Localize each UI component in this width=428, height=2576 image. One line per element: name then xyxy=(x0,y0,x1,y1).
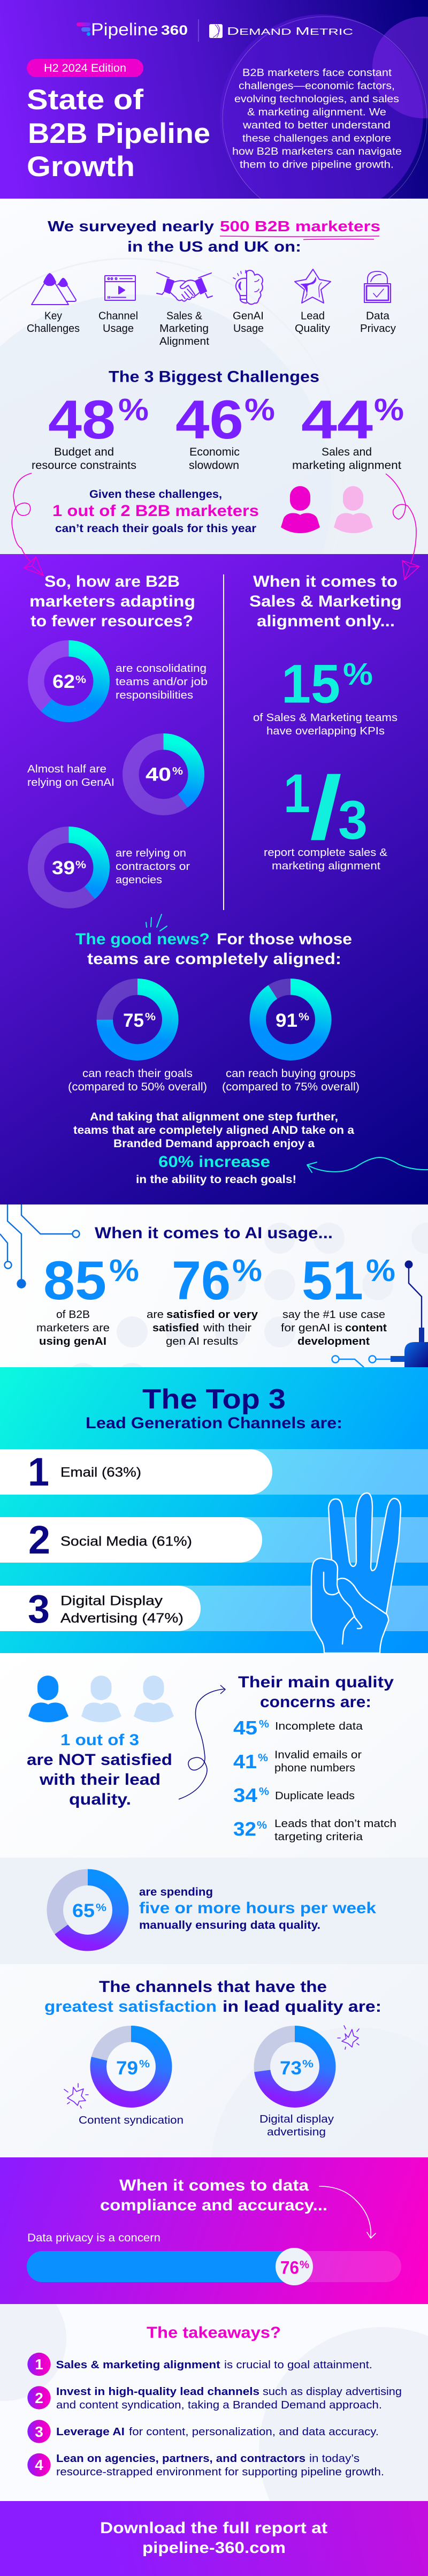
donut: 91 percent: can reach buying groups xyxy=(226,1067,356,1080)
takeaway 1: is crucial to goal attainment. xyxy=(224,2359,372,2371)
donut: 79 percent: Content syndication xyxy=(79,2115,184,2126)
circuit: left xyxy=(0,1204,79,1288)
stat list: concerns: Duplicate leads xyxy=(275,1790,355,1802)
text: five or more hours: manually ensuring data quality. xyxy=(139,1919,320,1931)
bar: email xyxy=(0,1449,272,1495)
topic labels: Privacy xyxy=(360,323,396,335)
stat: 15 percent: 15 xyxy=(281,653,340,714)
text: branded demand: 60% increase xyxy=(158,1153,270,1171)
bar: social media: 2 xyxy=(28,1518,50,1562)
stat: 76 percent xyxy=(147,1250,262,1347)
panel: footer: Download the full report at xyxy=(100,2519,327,2537)
text: branded demand: And taking that alignment one step further, xyxy=(90,1111,338,1123)
text: 1 out of 3: 1 out of 3 xyxy=(60,1731,139,1749)
stat: 44 percent: 44 xyxy=(301,389,373,450)
donut: 91 percent: 91 xyxy=(276,1010,297,1031)
logo: Pipeline360 xyxy=(77,20,188,39)
takeaway 3 xyxy=(27,2420,379,2443)
topic labels: Channel xyxy=(98,310,138,322)
donut: 62 percent xyxy=(36,648,102,714)
survey heading xyxy=(48,218,380,255)
text: 1 out of 3 xyxy=(27,1731,172,1808)
survey heading: 500 B2B marketers xyxy=(220,218,380,234)
topic labels: Data xyxy=(366,310,390,322)
heading: alignment: When it comes to xyxy=(253,573,398,590)
takeaway 1: Sales & marketing alignment xyxy=(56,2359,220,2371)
text: 1 out of 3: quality. xyxy=(69,1791,131,1808)
bar: email: Email (63%) xyxy=(60,1465,141,1480)
arrow: cyan wave xyxy=(307,1157,428,1172)
topic labels: Alignment xyxy=(159,336,209,347)
bar: email: 1 xyxy=(28,1450,49,1494)
icon: mountains xyxy=(32,274,76,305)
arrow: left swirl with paper plane xyxy=(12,473,43,575)
stat: one third: marketing alignment xyxy=(272,860,380,872)
progress bar: 76 percent xyxy=(27,2248,401,2285)
stat: 85 percent: marketers are xyxy=(36,1322,110,1334)
arrow: navy loop xyxy=(179,1685,225,1799)
text: consolidating: responsibilities xyxy=(116,690,193,701)
heading: top 3 xyxy=(86,1384,342,1432)
intro paragraph: them to drive pipeline growth. xyxy=(240,158,394,170)
intro paragraph: challenges—economic factors, xyxy=(239,80,395,92)
heading: top 3: The Top 3 xyxy=(142,1384,286,1415)
survey heading: in the US and UK on: xyxy=(127,238,301,255)
stat: 76 percent: satisfied or very xyxy=(166,1309,258,1321)
takeaway 3: 3 xyxy=(35,2423,43,2440)
takeaway 4: resource-strapped environment for supporting pipeline growth. xyxy=(56,2466,384,2478)
donut: 79 percent: 79 xyxy=(116,2058,138,2079)
stat list: concerns: 34 xyxy=(233,1784,257,1806)
topic labels xyxy=(27,310,396,347)
donut: 40 percent: % xyxy=(172,766,183,777)
topic labels: Marketing xyxy=(159,323,209,335)
text: five or more hours xyxy=(139,1886,376,1931)
stat: 51 percent: content xyxy=(345,1322,387,1334)
stat: 15 percent: have overlapping KPIs xyxy=(266,725,385,737)
donut: 79 percent: % xyxy=(139,2058,150,2070)
stat: 85 percent: using genAI xyxy=(39,1336,106,1347)
heading: main concerns: Their main quality xyxy=(238,1673,394,1691)
stat: 85 percent xyxy=(36,1250,139,1347)
topic labels: Quality xyxy=(295,323,330,335)
text: contractors xyxy=(116,847,190,886)
panel: data compliance xyxy=(0,2157,428,2304)
donut: 65 percent xyxy=(55,1877,120,1943)
text: five or more hours: are spending xyxy=(139,1886,213,1898)
stat: 46 percent: slowdown xyxy=(189,459,239,472)
icon: star xyxy=(295,269,331,303)
callout: 1 out of 2: 1 out of 2 B2B marketers xyxy=(52,502,259,520)
stat: 51 percent: % xyxy=(366,1253,395,1288)
stat: 76 percent: with their xyxy=(203,1322,251,1334)
intro paragraph: & marketing alignment. We xyxy=(247,106,386,118)
bar: digital display xyxy=(0,1586,201,1631)
panel: footer: pipeline-360.com xyxy=(142,2539,286,2557)
panel: top 3 lead generation channels xyxy=(0,1367,428,1653)
donut: 65 percent: 65 xyxy=(72,1900,95,1921)
bar: social media: Social Media (61%) xyxy=(60,1534,192,1549)
donut: 75 percent: 75 xyxy=(123,1010,144,1031)
stat: 15 percent: of Sales & Marketing teams xyxy=(253,712,398,724)
panel: lead quality xyxy=(0,1676,428,2157)
stat: 46 percent: % xyxy=(244,392,275,427)
intro paragraph xyxy=(232,67,402,170)
heading: adapting xyxy=(29,573,195,630)
stat: one third: / xyxy=(310,759,342,858)
heading: compliance: When it comes to data xyxy=(119,2177,309,2194)
callout: 1 out of 2: can’t reach their goals for this year xyxy=(55,522,256,535)
stat: 48 percent: % xyxy=(118,392,149,427)
panel: takeaways xyxy=(0,2304,428,2501)
heading: adapting: to fewer resources? xyxy=(30,612,193,630)
topic labels: Usage xyxy=(233,323,264,335)
text: branded demand: in the ability to reach goals! xyxy=(136,1173,296,1186)
text: genAI reliance xyxy=(27,763,114,789)
stat list: concerns: % xyxy=(257,1820,267,1831)
panel: header xyxy=(0,0,428,199)
intro paragraph: these challenges and explore xyxy=(242,133,391,145)
stat: 46 percent xyxy=(175,389,275,472)
stat: 76 percent: satisfied xyxy=(152,1322,199,1334)
stat list: concerns: phone numbers xyxy=(274,1762,355,1774)
heading: top 3: Lead Generation Channels are: xyxy=(86,1414,342,1432)
topic labels: Sales & xyxy=(166,310,203,322)
stat: 51 percent: development xyxy=(297,1336,370,1347)
donut: 75 percent: % xyxy=(145,1011,156,1023)
takeaway 3: for content, personalization, and data accuracy. xyxy=(129,2426,379,2438)
intro paragraph: wanted to better understand xyxy=(242,119,391,131)
heading: good news: teams are completely aligned: xyxy=(87,950,341,968)
stat list: concerns: Invalid emails or xyxy=(274,1749,362,1761)
heading: good news: The good news? xyxy=(75,930,210,948)
heading: alignment: Sales & Marketing xyxy=(249,593,402,610)
donut: 62 percent: % xyxy=(75,674,86,686)
takeaway 1: 1 xyxy=(35,2356,43,2373)
heading: alignment xyxy=(249,573,402,630)
panel: AI usage xyxy=(0,1204,428,1367)
donut: 75 percent: (compared to 50% overall) xyxy=(68,1081,207,1093)
progress bar: 76 percent: % xyxy=(300,2259,309,2271)
heading: alignment: alignment only... xyxy=(257,612,395,630)
donut: 73 percent: advertising xyxy=(267,2126,326,2138)
icon: genAI brain xyxy=(233,270,263,304)
heading: greatest satisfaction xyxy=(44,1978,381,2016)
takeaway 4: 4 xyxy=(35,2457,43,2473)
icon: lock xyxy=(364,271,391,302)
stat: one third: 3 xyxy=(338,790,368,851)
stat: one third xyxy=(264,759,388,872)
donut: 62 percent: 62 xyxy=(52,671,75,692)
title: B2B Pipeline xyxy=(28,118,210,149)
stat: 85 percent: % xyxy=(109,1253,139,1288)
heading: adapting: marketers adapting xyxy=(29,593,195,610)
donut: 73 percent xyxy=(259,2034,334,2138)
donut: 73 percent: 73 xyxy=(280,2058,302,2079)
stat: 44 percent xyxy=(292,389,404,472)
heading: good news xyxy=(75,930,352,968)
donut: 40 percent xyxy=(131,741,196,807)
donut: 39 percent xyxy=(36,835,102,900)
takeaway 2 xyxy=(27,2386,402,2411)
heading: greatest satisfaction: greatest satisfaction xyxy=(44,1998,217,2016)
text: 1 out of 3: are NOT satisfied xyxy=(27,1751,172,1769)
stat: 51 percent xyxy=(281,1250,395,1347)
title: Growth xyxy=(27,151,135,183)
donut: 91 percent: % xyxy=(299,1011,309,1023)
heading: good news: For those whose xyxy=(217,930,352,948)
text: consolidating xyxy=(116,663,208,701)
icon: handshake xyxy=(157,272,212,301)
heading: adapting: So, how are B2B xyxy=(44,573,180,590)
arrow: white curve xyxy=(319,2186,376,2238)
heading: compliance xyxy=(100,2177,327,2214)
title xyxy=(27,84,210,183)
intro paragraph: evolving technologies, and sales xyxy=(234,93,399,105)
bar: digital display: Digital Display xyxy=(60,1594,163,1609)
icon: star right xyxy=(338,2026,359,2049)
takeaway 3: Leverage AI xyxy=(56,2426,125,2438)
stat: 51 percent: 51 xyxy=(302,1250,363,1311)
panel: purple section xyxy=(0,554,428,1204)
stat: 51 percent: for genAI is xyxy=(281,1322,342,1334)
stat: 44 percent: % xyxy=(374,392,404,427)
stat list: concerns: % xyxy=(258,1752,268,1764)
callout: 1 out of 2: Given these challenges, xyxy=(89,488,222,501)
stat: 48 percent: resource constraints xyxy=(32,459,136,472)
logo: Pipeline360: Pipeline xyxy=(91,20,158,39)
stat: 76 percent: % xyxy=(232,1253,262,1288)
icon: people blue xyxy=(28,1676,174,1722)
text: genAI reliance: Almost half are xyxy=(27,763,106,775)
progress bar: 76 percent: 76 xyxy=(280,2258,299,2278)
heading: takeaways: The takeaways? xyxy=(147,2324,281,2342)
donut: 73 percent: Digital display xyxy=(259,2113,334,2125)
donut: 73 percent: % xyxy=(302,2058,314,2070)
icon: cyan sparks xyxy=(146,914,167,931)
bar label: Data privacy is a concern xyxy=(27,2232,160,2244)
donut: 39 percent: % xyxy=(75,859,86,871)
donut: 75 percent: can reach their goals xyxy=(82,1067,193,1080)
takeaway 1 xyxy=(27,2353,372,2376)
topic labels: Lead xyxy=(301,310,325,322)
title: State of xyxy=(27,84,143,116)
heading: greatest satisfaction: The channels that have the xyxy=(99,1978,327,1996)
donut: 65 percent: % xyxy=(96,1902,106,1914)
stat: 46 percent: Economic xyxy=(189,446,240,458)
stat: 48 percent xyxy=(32,389,149,472)
takeaway 4: in today’s xyxy=(309,2453,360,2465)
edition pill xyxy=(27,59,143,77)
stat: 48 percent: Budget and xyxy=(54,446,114,458)
stat: 76 percent: gen AI results xyxy=(166,1336,238,1347)
stat list: concerns xyxy=(233,1717,396,1843)
topic labels: Challenges xyxy=(27,323,80,335)
heading: AI usage: When it comes to AI usage... xyxy=(95,1224,333,1242)
panel: survey and challenges xyxy=(0,199,428,554)
stat: 46 percent: 46 xyxy=(175,389,243,450)
donut: 91 percent xyxy=(222,987,360,1093)
stat: one third: 1 xyxy=(284,763,310,824)
stat: 85 percent: 85 xyxy=(43,1250,106,1311)
stat list: concerns: 45 xyxy=(233,1717,257,1739)
heading: compliance: compliance and accuracy... xyxy=(100,2196,327,2214)
takeaway 2: such as display advertising xyxy=(263,2386,402,2398)
intro paragraph: B2B marketers face constant xyxy=(242,67,392,79)
stat: 15 percent: % xyxy=(343,657,373,692)
takeaway 4 xyxy=(27,2453,384,2478)
bar: digital display: 3 xyxy=(28,1587,50,1631)
stat list: concerns: % xyxy=(259,1786,269,1798)
circuit: right xyxy=(332,1260,428,1367)
text: contractors: contractors or xyxy=(116,861,190,873)
panel: footer xyxy=(0,2501,428,2576)
callout: 1 out of 2 xyxy=(52,488,259,535)
text: contractors: are relying on xyxy=(116,847,186,859)
logo: Demand Metric: D EMAND M ETRIC xyxy=(227,26,353,37)
text: genAI reliance: relying on GenAI xyxy=(27,777,114,789)
takeaway 2: 2 xyxy=(35,2390,43,2406)
intro paragraph: how B2B marketers can navigate xyxy=(232,146,402,157)
panel: manual data quality xyxy=(0,1858,428,1964)
topic labels: Key xyxy=(44,310,62,322)
stat: 44 percent: Sales and xyxy=(322,446,372,458)
stat: 76 percent: are xyxy=(147,1309,164,1321)
stat list: concerns: Incomplete data xyxy=(275,1721,363,1732)
takeaway 4: Lean on agencies, partners, and contractors xyxy=(56,2453,305,2465)
stat: 48 percent: 48 xyxy=(48,389,116,450)
heading: biggest challenges: The 3 Biggest Challenges xyxy=(109,368,319,385)
stat: 76 percent: 76 xyxy=(172,1250,231,1311)
text: 1 out of 3: with their lead xyxy=(39,1771,160,1789)
text: branded demand: Branded Demand approach enjoy a xyxy=(113,1138,315,1150)
stat: one third: report complete sales & xyxy=(264,847,388,859)
donut: 40 percent: 40 xyxy=(146,764,171,785)
stat list: concerns: 32 xyxy=(233,1818,256,1840)
stat: 15 percent xyxy=(253,653,398,737)
bar: digital display: Advertising (47%) xyxy=(60,1611,184,1626)
text: contractors: agencies xyxy=(116,874,162,886)
heading: main concerns xyxy=(238,1673,394,1711)
stat: 51 percent: say the #1 use case xyxy=(282,1309,385,1321)
logo: Pipeline360: 360 xyxy=(161,23,188,38)
icon: video window xyxy=(105,276,135,300)
text: consolidating: teams and/or job xyxy=(116,676,208,688)
stat list: concerns: Leads that don’t match xyxy=(274,1818,396,1830)
stat list: concerns: % xyxy=(259,1718,269,1730)
topic labels: GenAI xyxy=(233,310,264,322)
donut: 91 percent: (compared to 75% overall) xyxy=(222,1081,360,1093)
stat list: concerns: targeting criteria xyxy=(274,1831,363,1843)
icon: three fingers hand xyxy=(311,1493,401,1653)
heading: greatest satisfaction: in lead quality are: xyxy=(223,1998,381,2016)
text: branded demand: teams that are completely aligned AND take on a xyxy=(73,1124,354,1137)
survey heading: We surveyed nearly xyxy=(48,218,215,234)
logo: Demand Metric xyxy=(209,24,353,38)
takeaway 2: and content syndication, taking a Branded Demand approach. xyxy=(56,2399,382,2411)
arrow: right swirl with paper plane xyxy=(386,474,419,580)
text: branded demand xyxy=(73,1111,354,1186)
bar: social media xyxy=(0,1517,262,1563)
edition pill: H2 2024 Edition xyxy=(44,62,126,74)
takeaway 2: Invest in high-quality lead channels xyxy=(56,2386,259,2398)
topic labels: Usage xyxy=(103,323,134,335)
text: consolidating: are consolidating xyxy=(116,663,207,675)
stat list: concerns: 41 xyxy=(233,1751,257,1772)
text: five or more hours: five or more hours per week xyxy=(139,1899,376,1917)
donut: 39 percent: 39 xyxy=(52,858,75,878)
icon: people pink xyxy=(281,486,373,533)
heading: main concerns: concerns are: xyxy=(260,1693,371,1711)
stat: 44 percent: marketing alignment xyxy=(292,459,401,472)
donut: 79 percent xyxy=(79,2034,184,2126)
icon: star left xyxy=(64,2083,88,2108)
donut: 75 percent xyxy=(68,987,207,1093)
stat: 85 percent: of B2B xyxy=(56,1309,90,1321)
